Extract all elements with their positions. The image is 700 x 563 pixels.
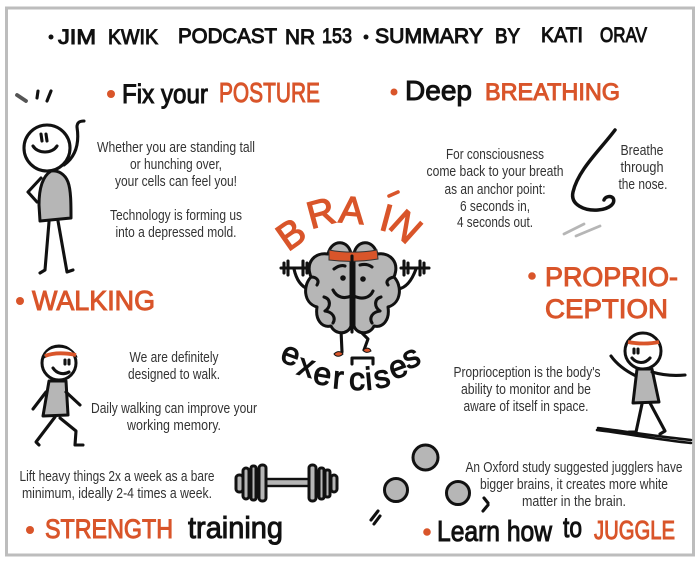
heading: learn how to juggle xyxy=(423,512,675,548)
text: walking xyxy=(91,350,257,434)
heading: learn how to juggle: Learn how xyxy=(437,516,553,548)
heading: proprioception xyxy=(528,262,678,324)
heading: proprioception: PROPRIO- xyxy=(545,262,678,292)
title: KATI xyxy=(541,24,583,47)
icon: standing figure xyxy=(17,91,84,273)
icon: brain character xyxy=(281,243,429,364)
text: posture: Technology is forming us xyxy=(110,208,242,224)
heading: deep breathing xyxy=(390,75,620,106)
text: breathe through the nose: through xyxy=(620,160,664,176)
title: JIM xyxy=(58,26,96,49)
text: juggling: matter in the brain. xyxy=(522,494,626,510)
text: posture: or hunching over, xyxy=(130,157,222,173)
title: BY xyxy=(495,25,520,48)
text: breathing: as an anchor point: xyxy=(444,182,546,198)
title xyxy=(48,24,647,49)
accent on brain title xyxy=(389,192,398,196)
text: proprioception: Proprioception is the body's xyxy=(454,365,600,381)
text: breathing: 4 seconds out. xyxy=(457,215,533,231)
title: SUMMARY xyxy=(375,25,483,48)
title: NR xyxy=(285,26,315,49)
heading: strength training xyxy=(26,510,283,545)
text: walking: Daily walking can improve your xyxy=(91,401,257,417)
text: lift heavy: minimum, ideally 2-4 times a week. xyxy=(22,486,212,502)
icon: walking figure xyxy=(33,346,83,445)
text: breathing: come back to your breath xyxy=(426,164,564,180)
text: lift heavy xyxy=(20,469,214,502)
text: proprioception: aware of itself in space. xyxy=(464,399,588,415)
icon: juggling balls xyxy=(371,445,488,524)
heading: strength training: training xyxy=(188,510,283,545)
icon: balancing figure xyxy=(597,333,691,443)
text: walking: We are definitely xyxy=(130,350,219,366)
text: breathing xyxy=(426,147,564,231)
title: 153 xyxy=(322,25,352,48)
text: lift heavy: Lift heavy things 2x a week as a bare xyxy=(20,469,214,485)
text: breathe through the nose: the nose. xyxy=(618,177,668,193)
text: posture xyxy=(97,140,255,241)
heading: deep breathing: BREATHING xyxy=(485,79,620,106)
text: juggling xyxy=(466,460,682,510)
title: KWIK xyxy=(108,26,158,49)
text: posture: Whether you are standing tall xyxy=(97,140,255,156)
text: proprioception xyxy=(454,365,600,415)
text: breathe through the nose xyxy=(618,143,668,193)
title: ORAV xyxy=(600,24,647,47)
heading: walking: WALKING xyxy=(32,285,155,316)
central title: brain: BRAIN xyxy=(269,189,429,259)
text: juggling: bigger brains, it creates more white xyxy=(480,477,668,493)
heading: deep breathing: Deep xyxy=(405,75,472,106)
title: PODCAST xyxy=(178,25,277,48)
text: breathing: For consciousness xyxy=(446,147,544,163)
heading: proprioception: CEPTION xyxy=(545,294,668,324)
text: breathing: 6 seconds in, xyxy=(460,199,530,215)
heading: fix your posture: Fix your xyxy=(122,79,208,109)
heading: learn how to juggle: JUGGLE xyxy=(594,515,675,545)
heading: learn how to juggle: to xyxy=(563,512,582,544)
heading: strength training: STRENGTH xyxy=(45,514,173,544)
text: proprioception: ability to monitor and be xyxy=(461,382,591,398)
text: posture: your cells can feel you! xyxy=(115,174,237,190)
icon: nose xyxy=(564,130,615,236)
text: posture: into a depressed mold. xyxy=(116,225,236,241)
heading: fix your posture: POSTURE xyxy=(219,77,320,108)
text: walking: designed to walk. xyxy=(128,367,220,383)
heading: fix your posture xyxy=(107,77,320,109)
icon: barbell xyxy=(236,465,337,501)
text: walking: working memory. xyxy=(126,418,221,434)
central title: exercises: exercises xyxy=(277,334,425,397)
text: breathe through the nose: Breathe xyxy=(620,143,664,159)
